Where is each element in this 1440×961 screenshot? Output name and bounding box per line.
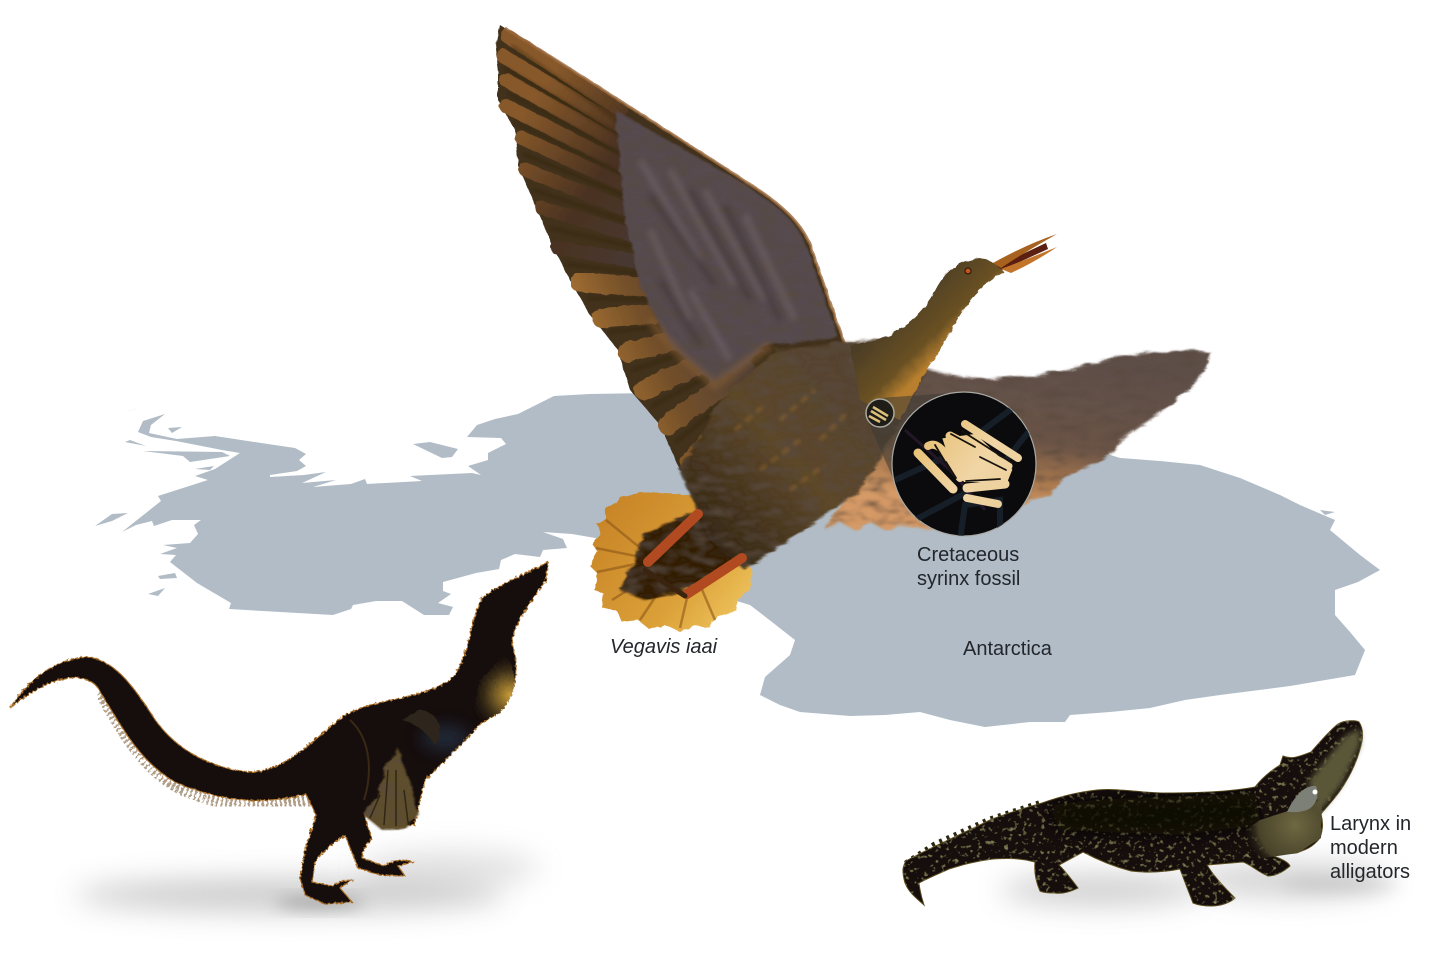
covert feather marks bbox=[640, 160, 795, 360]
tail feather lines bbox=[596, 520, 715, 628]
tail dark centre bbox=[620, 510, 738, 600]
bird body bbox=[680, 340, 925, 570]
alligator throat bbox=[1210, 800, 1322, 860]
wing base shape bbox=[495, 25, 845, 480]
larynx white dot bbox=[1312, 790, 1318, 794]
raptor thigh highlight bbox=[350, 720, 369, 800]
raptor body silhouette bbox=[10, 562, 548, 904]
map: Antarctica bbox=[95, 393, 1380, 727]
fossil mass bbox=[945, 436, 1010, 480]
bird: Vegavis iaai bbox=[495, 25, 1057, 632]
alligator jaw bbox=[1308, 728, 1360, 812]
raptor tail fringe bbox=[104, 690, 310, 803]
label: larynx: modern bbox=[1330, 837, 1398, 859]
tail fan bbox=[590, 492, 752, 632]
alligator body bbox=[903, 721, 1363, 906]
label: fossil: Cretaceous bbox=[917, 544, 1019, 566]
mauve covert patch bbox=[615, 110, 838, 385]
covert lower warm edge bbox=[650, 320, 770, 385]
alligator back scutes bbox=[906, 803, 1042, 864]
small fossil bbox=[869, 407, 888, 422]
label: fossil: syrinx fossil bbox=[917, 568, 1020, 590]
raptor chest highlight bbox=[470, 655, 514, 725]
far wing bbox=[825, 351, 1210, 530]
label: larynx: Larynx in bbox=[1330, 813, 1411, 835]
eye bbox=[965, 268, 971, 274]
raptor arm feather lines bbox=[370, 770, 408, 826]
secondary feathers bbox=[580, 282, 760, 462]
alligator bbox=[903, 721, 1363, 906]
label: continent: Antarctica bbox=[963, 638, 1053, 660]
raptor: feathered dinosaur bbox=[10, 562, 548, 904]
main wing bbox=[495, 25, 845, 480]
covert feather shadows bbox=[650, 190, 780, 345]
leading edge rim bbox=[505, 28, 845, 345]
neck and head bbox=[850, 258, 1004, 420]
alligator back darkness bbox=[1048, 793, 1262, 835]
shadow: alligator bbox=[1000, 862, 1400, 906]
label: species: Vegavis iaai bbox=[610, 636, 718, 658]
beak bbox=[993, 234, 1057, 273]
fossil background veins bbox=[894, 408, 1030, 536]
small locator circle bbox=[866, 399, 894, 427]
primary feathers bbox=[503, 36, 660, 265]
alligator larynx highlight bbox=[1287, 786, 1318, 812]
large circle bbox=[892, 392, 1036, 536]
bird legs bbox=[645, 514, 742, 596]
raptor shoulder bbox=[402, 710, 440, 745]
shadow: raptor bbox=[75, 850, 540, 912]
raptor flank blue tint bbox=[421, 725, 469, 751]
label: larynx: alligators bbox=[1330, 861, 1410, 883]
fossil grooves bbox=[935, 431, 1012, 481]
fossil rings bbox=[918, 424, 1018, 504]
feather grooves bbox=[505, 46, 752, 442]
inset cone bbox=[868, 392, 964, 478]
body flecks bbox=[735, 390, 850, 490]
raptor arm feathers bbox=[364, 748, 418, 830]
callout: fossil inset bbox=[866, 392, 1036, 540]
